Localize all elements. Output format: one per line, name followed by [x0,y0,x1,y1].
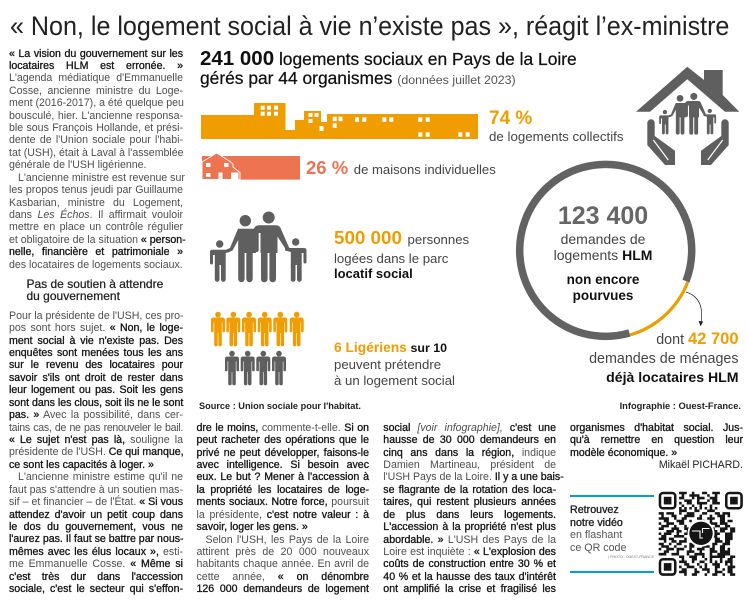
article column 1 bottom: ment social à vie n'existe pas. Des [9,335,183,347]
article column 2: ments sociaux. Notre force, poursuit [196,496,369,508]
article column 2: Selon l'USH, les Pays de la Loire [206,534,369,546]
article column 4 [570,422,743,471]
article column 1 bottom: le dos du gouvernement, vous ne [9,521,183,533]
article column 1 bottom: me Emmanuelle Cosse. « Même si [9,558,183,570]
ring text [554,202,652,303]
article column 1 top: locataires HLM est erronée. » [9,60,183,72]
article column 2: savoir, loger les gens. » [196,521,308,533]
article column 2: habitants chaque année. En avril de [196,558,369,570]
article column 2: privé ne peut développer, faisons-le [196,447,369,459]
article column 1 bottom: savoir s'ils ont droit de rester dans [9,372,183,384]
article column 2: eux. Le but ? Mener à l'accession à [196,471,369,483]
article column 1 bottom: sur le revenu des locataires pour [9,359,183,371]
article column 2: cette année, « on dénombre [196,571,369,583]
stat: 500 000 personnes: logées dans le parc [334,251,448,266]
article column 1 bottom: L'ancienne ministre estime qu'il ne [18,471,183,483]
article column 2: 126 000 demandeurs de logement [196,583,369,595]
article column 1 bottom: pos sont hors sujet. « Non, le loge- [9,322,183,334]
stat: 74 % collectifs: 74 % [489,108,532,129]
article column 1 bottom: c'est très dur dans l'accession [9,571,183,583]
QR caption: ce QR code [570,542,626,554]
subheading: du gouvernement [26,289,120,303]
stat: 6 Ligériens sur 10: à un logement social [334,372,455,388]
icon: house with family and hands [636,67,739,165]
article column 3: hausse de 30 000 demandeurs en [383,434,556,446]
QR caption: Retrouvez [570,504,619,516]
ring chart [520,164,692,336]
QR caption: notre vidéo [570,516,623,528]
article column 2 [196,422,370,595]
article column 3: social [voir infographie], c'est une [383,422,556,434]
article column 1 top: bousculé, hier. L'ancienne responsa- [9,110,183,122]
article column 1 top: ble sous François Hollande, et prési- [9,122,183,134]
article column 1 bottom: leur logement ou pas. Soit les gens [9,384,183,396]
callout: dont 42 700 [589,330,738,385]
ring text: 123 400 [558,202,648,230]
article column 3 [383,422,564,595]
article column 1 bottom: sif – et financier – de l'État. « Si vous [9,496,183,508]
QR code [659,493,742,575]
article column 1 top: ment (2016-2017), a été quelque peu [9,97,184,109]
article column 3: L'accession à la propriété n'est plus [383,521,556,533]
article column 1 top: « La vision du gouvernement sur les [9,48,183,60]
ring text: demandes de [561,231,645,247]
article column 1 bottom: attendez d'avoir un petit coup dans [9,509,183,521]
callout: dont 42 700: déjà locataires HLM [606,369,738,385]
article column 2: la présidente, c'est notre valeur : à [196,509,369,521]
article column 1 bottom: sont dans les clous, soit ils ne le sont [9,397,183,409]
article column 1 bottom: Pour la présidente de l'USH, ces pro- [9,310,184,322]
article column 1 top: les propos tenus jeudi par Guillaume [9,184,183,196]
credit: infographie: Infographie : Ouest-France. [620,401,741,411]
stat: 74 % collectifs: de logements collectifs [489,129,624,144]
stat: 500 000 personnes: 500 000 personnes [334,227,469,248]
article column 2: avec intelligence. Si besoin avec [196,459,369,471]
stat: 74 % collectifs [489,108,624,144]
article column 1 bottom: mêmes avec les élus locaux », esti- [9,546,183,558]
article column 1 top: et obligatoire de la situation « person- [9,234,186,246]
article column 2: dre le moins, commente-t-elle. Si on [196,422,369,434]
article column 1 bottom: l'aurez pas. Il faut se battre par nous- [9,533,184,545]
article column 1 top: tat (USH), était à Laval à l'assemblée [9,147,184,159]
article column 3: Damien Martineau, président de [383,459,556,471]
article column 3: Loire est inquiète : « L'explosion des [383,546,556,558]
source: Source : Union sociale pour l'habitat. [199,401,361,411]
article column 1 top: L'ancienne ministre est revenue sur [18,172,185,184]
article column 1 bottom [9,310,184,595]
stat: 6 Ligériens sur 10 [334,340,455,388]
article column 1 bottom: enquêtes sont menées tous les ans [9,347,183,359]
ring text: logements HLM [554,247,652,263]
article column 1 top: Kasbarian, ministre du Logement, [9,197,183,209]
article column 1 top: dente de l'Union sociale pour l'habi- [9,134,183,146]
article column 1 bottom: ce sont les capacités à loger. » [9,459,154,471]
article column 3: taires, qui restent plusieurs années [383,496,556,508]
blue rules [570,495,654,497]
stat: 26 % maisons: 26 % de maisons individuelles [306,157,496,178]
article column 1 top: L'agenda médiatique d'Emmanuelle [9,72,183,84]
heading: 241 000 logements [200,47,577,88]
article column 4: organismes d'habitat social. Jus- [570,422,743,434]
article column 4: Mikaël PICHARD. [659,459,743,471]
heading: 241 000 logements: gérés par 44 organismes (données juillet 2023) [200,68,516,88]
article column 2: peut racheter des opérations que le [196,434,369,446]
article column 2: la propriété les locataires de loge- [196,484,369,496]
article column 1 top: générale de l'USH ligérienne. [9,159,146,171]
QR caption [570,504,626,554]
callout: dont 42 700: dont 42 700 [656,330,738,348]
article column 1 bottom: présidente de l'USH. Ce qui manque, [9,446,184,458]
article column 1 bottom: sociale, c'est le secteur qui s'effon- [9,583,183,595]
stat: 500 000 personnes: locatif social [334,266,413,281]
article column 1 bottom: faut pas s'attendre à un soutien mas- [9,484,183,496]
article column 3: abordable. » L'USH des Pays de la [383,534,556,546]
article column 3: l'USH Pays de la Loire. Il y a une bais- [383,471,564,483]
arrow [686,292,703,326]
icon: 10 people pictogram [211,312,304,385]
heading: 241 000 logements: 241 000 logements sociaux en Pays de la Loire [200,47,577,70]
article column 3: coûts de construction entre 30 % et [383,558,556,570]
subheading: Pas de soutien à attendre [26,277,163,291]
ring text: pourvues [573,288,633,303]
stat: 6 Ligériens sur 10: peuvent prétendre [334,357,441,372]
stat: 500 000 personnes [334,227,469,281]
callout: dont 42 700: demandes de ménages [589,351,738,367]
article column 2: attirent près de 20 000 nouveaux [196,546,369,558]
article column 1 top [9,48,186,271]
icon: apartment buildings bar [201,103,478,139]
article column 3: cinq ans dans la région, indique [383,447,556,459]
article column 1 top: nelle, financière et patrimoniale » [9,246,183,258]
article column 3: se flagrante de la rotation des loca- [383,484,556,496]
article column 1 top: des locataires de logements sociaux. [9,259,183,271]
photo credit: | PHOTO : OUEST-FRANCE [608,554,654,558]
article column 1 top: Cosse, ancienne ministre du Loge- [9,85,183,97]
subheading [26,277,163,303]
article column 1 bottom: pas. » Avec la possibilité, dans cer- [9,409,183,421]
article column 4: modèle économique. » [570,447,677,459]
article column 1 bottom: tains cas, de ne pas renouveler le bail. [9,422,183,434]
QR caption: en flashant [570,529,622,541]
article column 1 bottom: « Le sujet n'est pas là, souligne la [9,434,183,446]
icon: house bar [202,153,300,180]
stat: 6 Ligériens sur 10: 6 Ligériens sur 10 [334,340,447,355]
article column 3: ont amplifié la crise et fragilisé les [383,583,556,595]
article column 4: qu'à remettre en question leur [570,434,743,446]
icon: family of four [210,212,306,282]
icon: QR code centre logo [688,520,714,547]
article column 1 top: dans Les Échos. Il affirmait vouloir [9,209,183,221]
article column 1 top: mettre en place un contrôle régulier [9,221,183,233]
article column 3: 40 % et la hausse des taux d'intérêt [383,571,556,583]
article column 3: de plus dans leurs logements. [383,509,556,521]
title: « Non, le logement social à vie n’existe pas », réagit l’ex-ministre [10,11,729,41]
ring text: non encore [567,272,639,287]
